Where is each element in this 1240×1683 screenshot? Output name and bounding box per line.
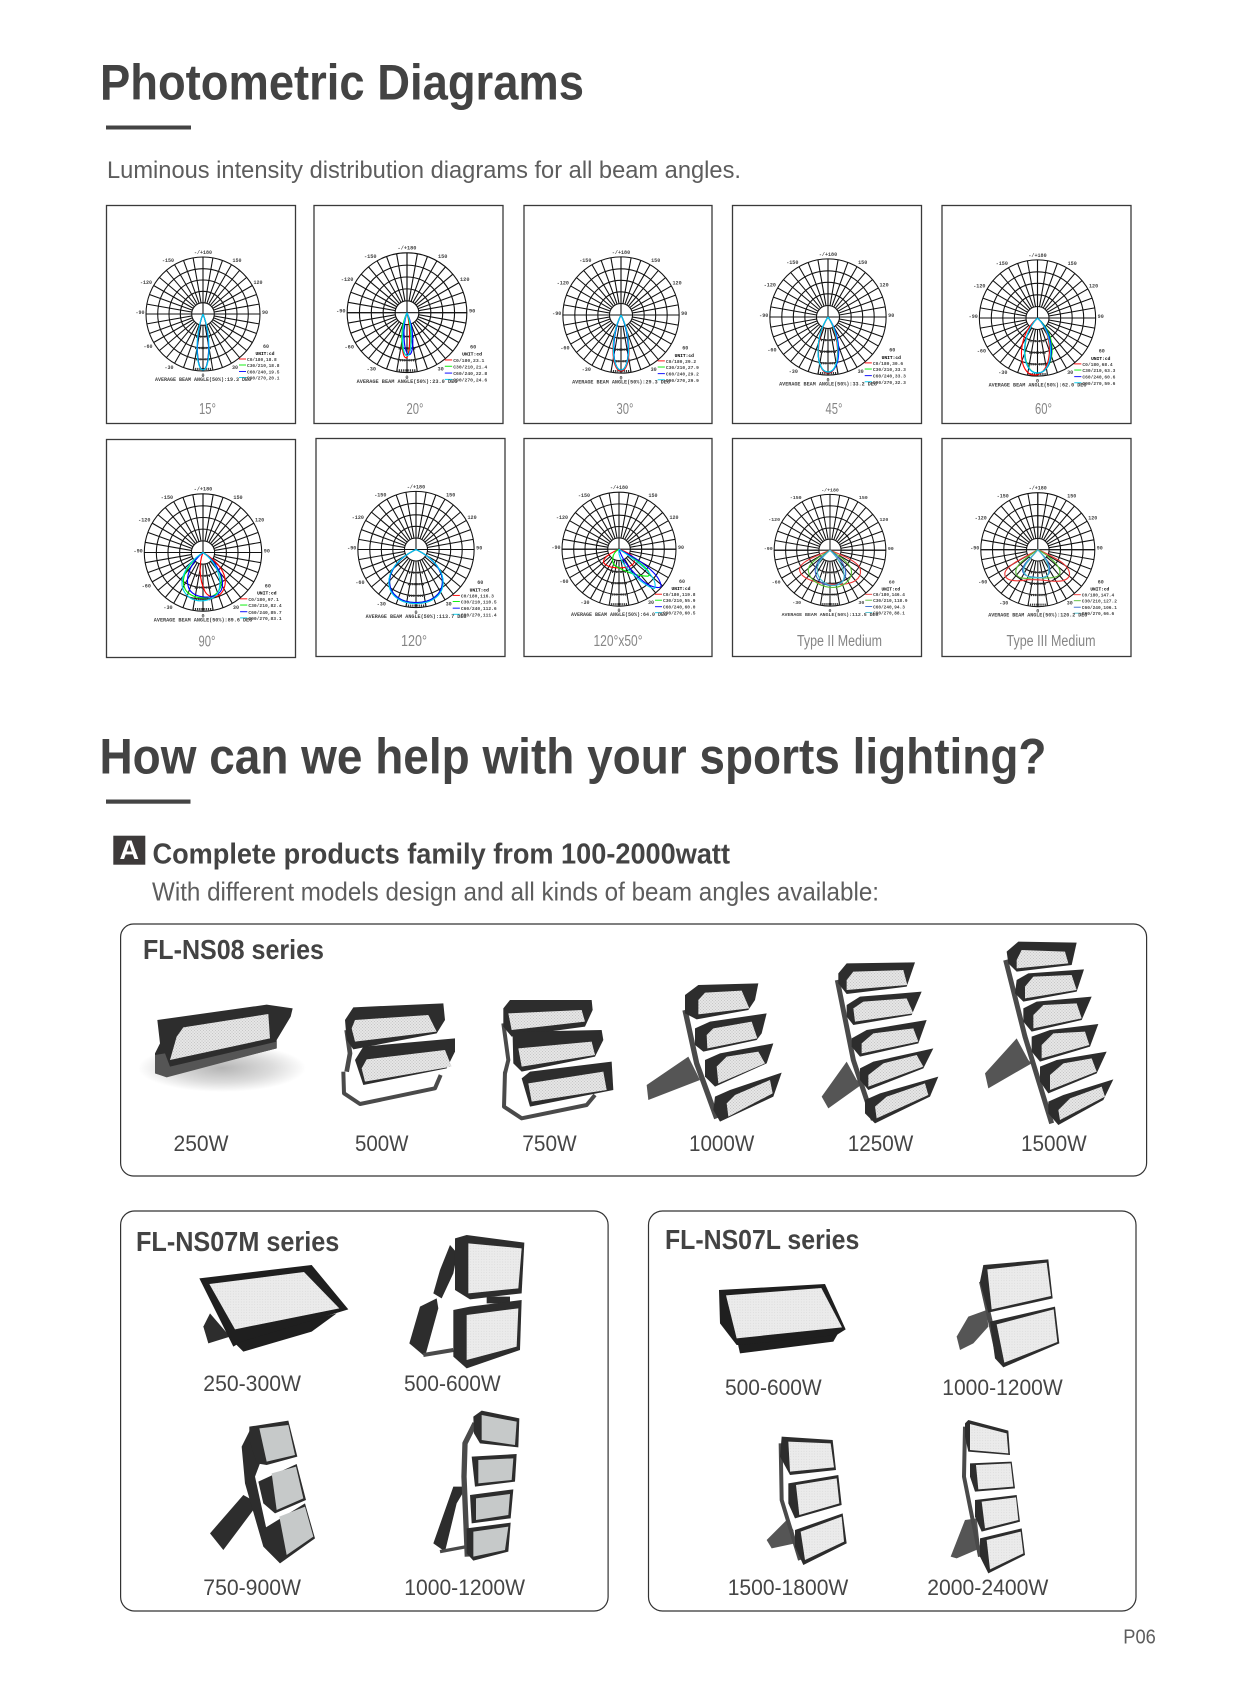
panel: FL-NS07L series (648, 1211, 1136, 1611)
polar chart: 20 degree: -30 (367, 366, 376, 372)
polar chart: 120 degree: -150 (374, 492, 386, 498)
polar chart: 15 degree: -60 (143, 344, 153, 350)
polar chart: 30 degree: 90 (681, 311, 687, 317)
polar chart: 20 degree: -60 (345, 344, 354, 350)
polar chart: 120x50 degree (551, 485, 696, 618)
product: 750W (503, 1000, 613, 1156)
polar chart: 90 degree: 90 (264, 548, 270, 555)
polar chart: 90 degree: UNIT:cd (257, 591, 277, 597)
polar chart: 60 degree: 150 (1068, 261, 1077, 267)
polar chart: Type III Medium: -60 (978, 580, 987, 586)
polar chart: 15 degree: 60 (263, 344, 269, 350)
polar chart: 45 degree (759, 252, 906, 387)
polar chart: 60 degree: -/+180 (1028, 253, 1047, 259)
polar chart: 60 degree: C60/240,60.6 (1082, 375, 1116, 381)
polar chart: 120x50 degree: 30 (648, 600, 654, 606)
polar chart: 15 degree: 120 (253, 280, 263, 286)
polar chart: 60 degree: C0/180,68.4 (1082, 362, 1113, 368)
polar chart: Type III Medium: C60/240,106.1 (1082, 605, 1117, 611)
polar chart: 120x50 degree: 90 (678, 545, 684, 551)
polar chart: 60 degree: -120 (973, 283, 985, 289)
polar chart: Type III Medium: -150 (997, 494, 1009, 500)
polar chart: 30 degree: -30 (582, 367, 591, 373)
polar chart: 20 degree: 60 (470, 344, 476, 350)
polar chart: 30 degree: -90 (552, 311, 561, 317)
polar chart: 45 degree: AVERAGE BEAM ANGLE(50%):33.2 DEG (779, 381, 877, 387)
polar chart: Type II Medium: -150 (790, 495, 802, 501)
polar chart: 90 degree: C30/210,82.4 (248, 603, 282, 609)
polar chart: 20 degree: 30 (437, 366, 444, 372)
product: 1000W: 1000W (689, 1131, 755, 1156)
polar chart: 45 degree: C0/180,30.6 (873, 361, 903, 367)
panel: FL-NS08 series (121, 924, 1147, 1176)
polar chart: 15 degree: C0/180,18.8 (247, 357, 277, 363)
polar chart: 90 degree: -60 (142, 584, 151, 590)
product: 2000-2400W: 2000-2400W (927, 1575, 1049, 1600)
polar chart: Type II Medium: 150 (859, 495, 868, 501)
polar chart: 120 degree: C60/240,112.6 (461, 606, 497, 612)
polar chart: 120x50 degree: C90/270,60.5 (663, 611, 696, 617)
panel: FL-NS07M series (121, 1211, 608, 1611)
polar chart: 90 degree: AVERAGE BEAM ANGLE(50%):89.6 DEG (154, 618, 252, 624)
polar chart: 15 degree: 150 (232, 258, 242, 264)
product: 500-600W (719, 1284, 846, 1400)
polar chart: 30 degree: -120 (557, 280, 569, 286)
polar chart: 120x50 degree: 0 (617, 608, 621, 614)
polar chart: 120 degree: 0 (414, 610, 418, 616)
polar chart: 45 degree: -30 (789, 369, 798, 375)
polar chart: 120x50 degree: -60 (559, 579, 569, 585)
polar chart: 90 degree: -120 (138, 518, 150, 524)
polar chart: 45 degree: -60 (767, 348, 776, 354)
polar chart: 20 degree (336, 246, 487, 385)
polar chart: 120x50 degree: C0/180,119.8 (663, 592, 696, 598)
product: 250W: 250W (174, 1131, 229, 1156)
panel: 120 degree diagram (316, 438, 505, 656)
polar chart: 120x50 degree: AVERAGE BEAM ANGLE(50%):64.0 DEG (571, 612, 667, 618)
polar chart: 120 degree: C0/180,116.3 (461, 593, 494, 599)
polar chart: 20 degree: -/+180 (398, 246, 416, 252)
series title: FL-NS08 series (143, 934, 324, 965)
polar chart: 20 degree: C90/270,24.6 (453, 377, 487, 383)
polar chart: 60 degree (969, 253, 1116, 388)
polar chart: Type III Medium: UNIT:cd (1090, 587, 1110, 593)
polar chart: 30 degree: 30 (651, 367, 657, 373)
page number: P06 (1123, 1626, 1156, 1648)
polar chart: 15 degree: C90/270,20.1 (247, 376, 280, 382)
polar chart: Type II Medium: -120 (768, 517, 780, 523)
caption: 120° (401, 633, 427, 650)
polar chart: 15 degree: -/+180 (194, 250, 212, 256)
product: 1000-1200W: 1000-1200W (404, 1575, 525, 1600)
polar chart: 60 degree: C30/210,63.3 (1082, 368, 1116, 374)
polar chart: Type III Medium: C90/270,66.6 (1082, 611, 1115, 617)
polar chart: 60 degree: 120 (1089, 283, 1098, 289)
polar chart: 15 degree: C30/210,18.8 (247, 363, 280, 369)
product: 500-600W: 500-600W (725, 1375, 822, 1400)
polar chart: 60 degree: 30 (1067, 370, 1073, 376)
polar chart: 120 degree: -30 (377, 602, 386, 608)
heading underline (106, 800, 190, 804)
polar chart: 120 degree: -120 (352, 515, 364, 521)
polar chart: 20 degree: -120 (341, 277, 353, 283)
polar chart: 15 degree: -120 (140, 280, 152, 286)
polar chart: Type III Medium: 90 (1097, 546, 1103, 552)
subtitle: Luminous intensity distribution diagrams for all beam angles. (107, 157, 741, 184)
polar chart: 45 degree: 0 (826, 377, 830, 383)
polar chart: 30 degree: -/+180 (612, 250, 630, 256)
polar chart: 90 degree: -/+180 (194, 487, 212, 493)
product: 1000-1200W (404, 1411, 525, 1600)
product: 500W: 500W (355, 1131, 409, 1156)
polar chart: 20 degree: UNIT:cd (462, 352, 482, 358)
polar chart: 120 degree: 90 (476, 546, 482, 551)
product: 500W (343, 1003, 455, 1156)
caption: 30° (616, 401, 634, 418)
polar chart: 60 degree: -150 (996, 261, 1008, 267)
polar chart: 15 degree: -30 (164, 365, 174, 371)
polar chart: 45 degree: -120 (764, 282, 776, 288)
product: 1000-1200W (942, 1259, 1063, 1400)
panel: 20 degree diagram (314, 206, 503, 424)
polar chart: Type II Medium: C60/240,94.3 (873, 605, 905, 611)
caption: 45° (826, 401, 842, 418)
polar chart: Type II Medium: -30 (792, 600, 801, 606)
polar chart: 20 degree: AVERAGE BEAM ANGLE(50%):23.0 DEG (357, 379, 457, 385)
product: 250-300W (199, 1265, 348, 1396)
panel: Type II Medium diagram (732, 438, 922, 656)
polar chart: Type III Medium: 60 (1098, 580, 1104, 586)
polar chart: 45 degree: UNIT:cd (882, 355, 901, 361)
polar chart: Type II Medium: -/+180 (821, 487, 839, 493)
polar chart: 120 degree: 60 (477, 580, 483, 586)
polar chart: 45 degree: 150 (858, 260, 867, 266)
polar chart: 60 degree: 90 (1098, 314, 1104, 320)
polar chart: 60 degree: -60 (977, 349, 986, 355)
polar chart: 120x50 degree: 60 (679, 579, 685, 585)
section heading: Complete products family from 100-2000watt (152, 838, 730, 870)
title: Photometric Diagrams: Photometric Diagrams (100, 54, 584, 110)
polar chart: 120 degree: 120 (468, 515, 477, 521)
polar chart: Type III Medium: -120 (975, 516, 987, 522)
polar chart: 15 degree: 90 (262, 310, 268, 316)
polar chart: 45 degree: 30 (858, 369, 864, 375)
polar chart: Type II Medium: UNIT:cd (882, 586, 900, 592)
panel: 90 degree diagram (106, 440, 296, 658)
product: 750-900W: 750-900W (203, 1575, 301, 1600)
polar chart: Type III Medium: C0/180,147.4 (1082, 593, 1115, 599)
polar chart: 20 degree: C60/240,22.8 (453, 371, 487, 377)
product: 1250W: 1250W (848, 1131, 914, 1156)
polar chart: 120x50 degree: -150 (578, 493, 590, 499)
product: 1500-1800W: 1500-1800W (728, 1575, 849, 1600)
panel: 120x50 degree diagram (524, 438, 712, 656)
polar chart: 120x50 degree: -/+180 (610, 485, 628, 491)
polar chart: Type II Medium: -60 (772, 580, 781, 586)
polar chart: 30 degree (552, 250, 699, 385)
polar chart: Type III Medium: -30 (999, 601, 1008, 607)
product: 1500W: 1500W (1021, 1131, 1087, 1156)
product: 750-900W (203, 1421, 315, 1600)
polar chart: Type III Medium: 30 (1067, 601, 1073, 607)
section subheading: With different models design and all kinds of beam angles available: (152, 877, 879, 907)
polar chart: 30 degree: C0/180,29.2 (666, 359, 696, 365)
polar chart: Type III Medium: 150 (1067, 494, 1076, 500)
polar chart: 120 degree: -/+180 (407, 484, 425, 490)
polar chart: 90 degree: 150 (233, 495, 243, 501)
polar chart: Type III Medium: AVERAGE BEAM ANGLE(50%):120.2 DEG (988, 613, 1087, 619)
caption: 60° (1035, 401, 1052, 418)
polar chart: 45 degree: -90 (759, 313, 768, 319)
polar chart: 20 degree: -150 (364, 254, 377, 260)
polar chart: 30 degree: C90/270,29.9 (666, 378, 699, 384)
product: 500-600W (404, 1235, 524, 1396)
polar chart: Type III Medium: -90 (970, 546, 979, 552)
series title: FL-NS07L series (665, 1224, 859, 1255)
panel: 30 degree diagram (524, 206, 712, 424)
polar chart: 120 degree (347, 484, 497, 620)
polar chart: 45 degree: 90 (888, 313, 894, 319)
polar chart: Type II Medium: -90 (764, 546, 773, 552)
polar chart: 45 degree: 120 (880, 282, 889, 288)
polar chart: 60 degree: C90/270,59.6 (1082, 381, 1116, 387)
polar chart: 90 degree: 60 (265, 584, 271, 590)
polar chart: 30 degree: 120 (673, 280, 682, 286)
polar chart: 20 degree: 0 (405, 375, 409, 381)
product: 750W: 750W (522, 1131, 577, 1156)
polar chart: Type II Medium: 120 (879, 517, 888, 523)
polar chart: Type II Medium: 0 (829, 608, 832, 614)
polar chart: 120 degree: 30 (446, 602, 452, 608)
polar chart: 120 degree: -90 (347, 546, 356, 551)
product: 1250W (822, 962, 938, 1156)
title underline (106, 126, 191, 130)
polar chart: 30 degree: UNIT:cd (675, 353, 694, 359)
product: 2000-2400W (927, 1420, 1049, 1600)
product: 250-300W: 250-300W (203, 1371, 301, 1396)
polar chart: 15 degree: AVERAGE BEAM ANGLE(50%):19.3 DEG (155, 377, 251, 383)
polar chart: 45 degree: C90/270,32.3 (873, 380, 906, 386)
polar chart: 90 degree: C0/180,97.1 (248, 597, 279, 603)
polar chart: 20 degree: 90 (469, 309, 475, 315)
polar chart: 30 degree: 60 (682, 346, 688, 352)
polar chart: 120x50 degree: UNIT:cd (672, 586, 691, 592)
polar chart: 120 degree: 150 (446, 492, 455, 498)
polar chart: 120x50 degree: C60/240,60.0 (663, 605, 696, 611)
polar chart: 60 degree: -90 (969, 314, 978, 320)
polar chart: Type II Medium (764, 487, 908, 618)
polar chart: Type II Medium: 30 (858, 600, 864, 606)
product: 1000W (647, 983, 782, 1156)
caption: 20° (406, 401, 424, 418)
series title: FL-NS07M series (136, 1226, 339, 1257)
caption: Type III Medium (1006, 633, 1096, 650)
polar chart: 45 degree: -/+180 (819, 252, 837, 258)
polar chart: 20 degree: 120 (460, 277, 469, 283)
polar chart: 120 degree: -60 (355, 580, 364, 586)
polar chart: Type III Medium: C30/210,127.2 (1082, 599, 1117, 605)
polar chart: 120 degree: UNIT:cd (470, 587, 489, 593)
panel: 60 degree diagram (942, 206, 1131, 424)
polar chart: 90 degree: C60/240,85.7 (248, 610, 282, 616)
polar chart: 15 degree: -150 (162, 258, 174, 264)
polar chart: 120x50 degree: C30/210,55.9 (663, 598, 696, 604)
polar chart: 60 degree: 60 (1099, 349, 1105, 355)
polar chart: 120x50 degree: 120 (669, 515, 679, 521)
polar chart: 15 degree: 0 (201, 373, 205, 379)
polar chart: 90 degree: 120 (255, 518, 264, 524)
polar chart: Type II Medium: C90/270,88.1 (873, 610, 905, 616)
polar chart: 90 degree: 30 (233, 605, 239, 611)
polar chart: 30 degree: 150 (651, 258, 660, 264)
panel: 45 degree diagram (732, 206, 922, 424)
polar chart: Type III Medium: 0 (1036, 609, 1039, 615)
polar chart: 45 degree: 60 (889, 348, 895, 354)
polar chart: Type II Medium: C30/210,118.9 (873, 598, 908, 604)
polar chart: 30 degree: C30/210,27.9 (666, 365, 699, 371)
polar chart: 45 degree: C60/240,33.3 (873, 374, 906, 380)
polar chart: Type II Medium: C0/180,146.4 (873, 592, 905, 598)
polar chart: 30 degree: 0 (619, 375, 623, 381)
polar chart: 30 degree: -150 (579, 258, 591, 264)
caption: 90° (198, 634, 216, 650)
polar chart: 20 degree: C30/210,21.4 (453, 364, 487, 370)
polar chart: 90 degree: C90/270,83.1 (248, 616, 282, 622)
polar chart: 90 degree (133, 487, 282, 624)
polar chart: 30 degree: -60 (560, 346, 569, 352)
polar chart: 45 degree: -150 (786, 260, 798, 266)
product: 250W (138, 1005, 306, 1156)
polar chart: 20 degree: 150 (438, 254, 447, 260)
polar chart: 60 degree: 0 (1036, 378, 1039, 384)
polar chart: 15 degree (135, 250, 280, 383)
polar chart: 15 degree: C60/240,19.5 (247, 370, 280, 376)
polar chart: 120x50 degree: -120 (556, 515, 568, 521)
panel: Type III Medium diagram (942, 438, 1131, 656)
polar chart: 90 degree: -30 (163, 605, 173, 611)
caption: 15° (199, 401, 216, 418)
polar chart: 120 degree: C90/270,111.4 (461, 612, 497, 618)
polar chart: Type II Medium: AVERAGE BEAM ANGLE(50%):112.5 DEG (782, 612, 878, 618)
polar chart: 120 degree: C30/210,110.5 (461, 600, 497, 606)
polar chart: 120x50 degree: -90 (551, 545, 561, 551)
polar chart: 20 degree: C0/180,23.1 (453, 358, 485, 364)
polar chart: Type III Medium: 120 (1088, 516, 1097, 522)
product: 1500W (985, 942, 1113, 1156)
polar chart: 60 degree: UNIT:cd (1091, 356, 1111, 362)
caption: 120°x50° (594, 633, 642, 650)
panel: 15 degree diagram (106, 206, 296, 424)
polar chart: 120x50 degree: 150 (648, 493, 658, 499)
product: 500-600W: 500-600W (404, 1371, 501, 1396)
caption: Type II Medium (797, 633, 882, 650)
polar chart: 90 degree: 0 (201, 613, 205, 619)
polar chart: 20 degree: -90 (336, 309, 346, 315)
polar chart: Type III Medium: -/+180 (1029, 486, 1047, 492)
polar chart: 15 degree: UNIT:cd (256, 351, 275, 357)
product: 1000-1200W: 1000-1200W (942, 1375, 1063, 1400)
polar chart: 120 degree: AVERAGE BEAM ANGLE(50%):113.7 DEG (366, 614, 466, 620)
polar chart: 60 degree: -30 (998, 370, 1007, 376)
product: 1500-1800W (728, 1437, 849, 1600)
polar chart: 30 degree: C60/240,29.2 (666, 372, 699, 378)
heading: How can we help: How can we help with your sports lighting? (100, 728, 1046, 784)
polar chart: 90 degree: -90 (133, 548, 143, 555)
polar chart: 60 degree: AVERAGE BEAM ANGLE(50%):62.0 DEG (989, 382, 1086, 388)
badge A (113, 835, 145, 865)
polar chart: 120x50 degree: -30 (580, 600, 590, 606)
polar chart: Type II Medium: 90 (888, 546, 894, 552)
polar chart: Type III Medium (970, 486, 1117, 619)
badge A: A (120, 835, 139, 865)
polar chart: 15 degree: -90 (135, 310, 145, 316)
polar chart: 90 degree: -150 (161, 495, 173, 501)
polar chart: 15 degree: 30 (232, 365, 238, 371)
polar chart: 45 degree: C30/210,33.3 (873, 367, 906, 373)
polar chart: Type II Medium: 60 (889, 580, 895, 586)
polar chart: 30 degree: AVERAGE BEAM ANGLE(50%):29.3 DEG (572, 379, 670, 385)
